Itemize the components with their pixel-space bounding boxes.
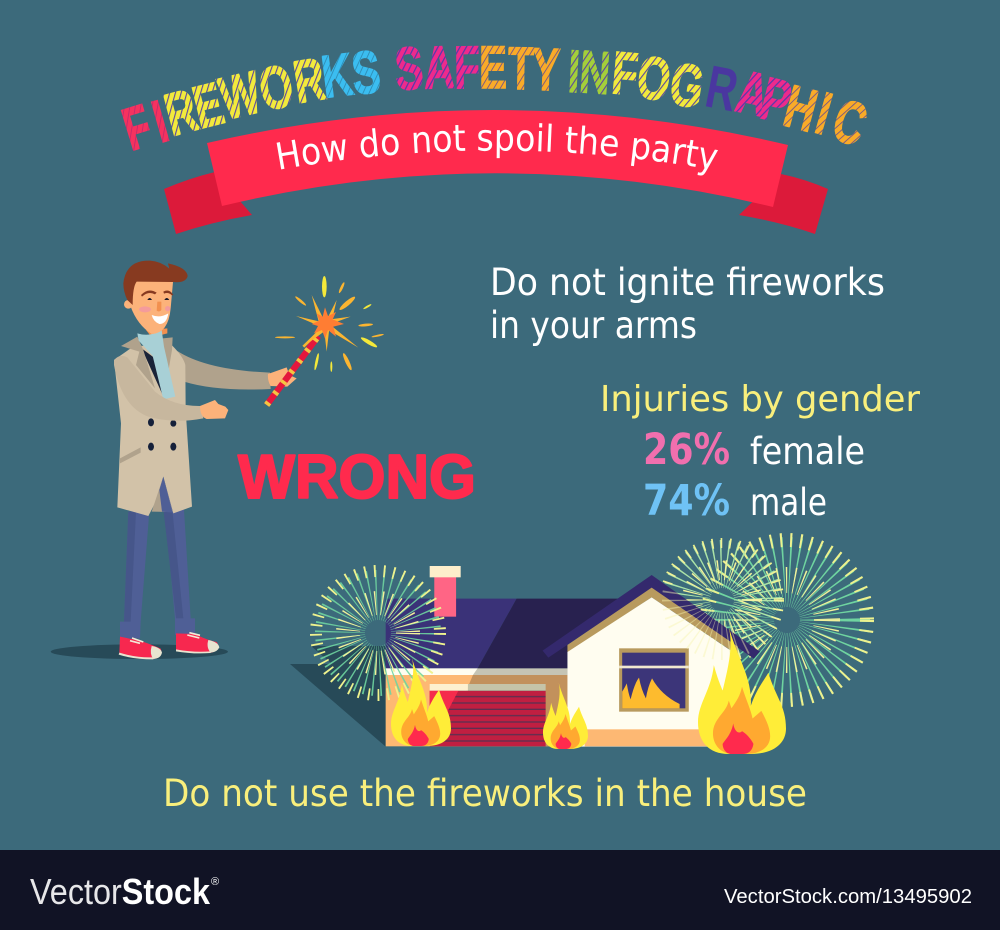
title: I	[809, 79, 839, 147]
registered mark: ®	[211, 876, 219, 888]
ground shadow	[51, 644, 228, 659]
heading: do not ignite	[490, 261, 885, 347]
neck	[146, 328, 167, 337]
title: I	[566, 37, 582, 105]
ribbon banner	[164, 110, 828, 234]
coat inner shade	[152, 477, 173, 512]
scarf	[137, 330, 175, 399]
title: N	[578, 38, 612, 107]
burning house	[290, 566, 760, 747]
garage wall	[386, 675, 567, 746]
title: A	[423, 33, 455, 101]
title: O	[634, 43, 674, 113]
ribbon main band	[207, 110, 788, 207]
title: F	[115, 91, 159, 163]
male stat	[643, 476, 827, 526]
title	[115, 33, 875, 163]
fascia shade	[473, 668, 567, 675]
back arm	[177, 351, 271, 390]
title: S	[349, 37, 383, 107]
female stat: female	[750, 430, 865, 473]
title: F	[454, 33, 480, 101]
title: I	[145, 87, 175, 155]
stats heading: Injuries by gender	[600, 379, 920, 420]
ribbon right tail	[739, 174, 828, 234]
male stat: 74%	[643, 476, 730, 526]
ribbon left tail	[164, 172, 252, 234]
heading: do not ignite: in your arms	[490, 304, 697, 347]
shirt	[142, 348, 163, 395]
title: W	[213, 58, 267, 132]
title: K	[318, 40, 356, 110]
window	[619, 648, 689, 712]
footer bar	[0, 850, 1000, 930]
title: H	[778, 72, 824, 145]
subtitle: How do not spoil the party	[276, 123, 718, 176]
shoes	[119, 633, 219, 659]
footer url: VectorStock.com/13495902	[724, 886, 972, 908]
title: S	[393, 34, 425, 103]
title: A	[731, 57, 775, 129]
sparks	[275, 276, 384, 372]
roof left	[386, 599, 517, 668]
footer logo: VectorStock	[30, 871, 211, 912]
chimney	[430, 566, 461, 617]
wall base	[585, 729, 707, 746]
title: R	[289, 45, 329, 116]
house wall	[567, 597, 736, 747]
buttons	[148, 418, 176, 451]
man with sparkler	[51, 261, 384, 659]
title: Y	[531, 35, 561, 103]
title: T	[508, 34, 535, 102]
title: R	[701, 52, 743, 124]
title: P	[754, 64, 798, 136]
lapels	[121, 337, 173, 388]
pocket	[120, 447, 141, 463]
flame: middle	[543, 683, 588, 749]
firework: right large	[707, 540, 867, 700]
trouser front	[159, 477, 173, 513]
sparkler stick	[267, 327, 323, 405]
firework overlay on gable	[686, 564, 758, 636]
hand holding sparkler	[268, 367, 297, 387]
injuries by gender stats	[600, 379, 920, 526]
firework: middle right	[665, 543, 779, 657]
firework: left	[316, 571, 440, 695]
flame: right	[698, 627, 786, 754]
gable roof	[543, 575, 760, 659]
title: F	[609, 39, 641, 108]
title: E	[479, 34, 507, 101]
WRONG label: WRONG	[238, 443, 476, 512]
caption: do not use in house: Do not use the fireworks in the house	[163, 772, 807, 815]
title: O	[254, 51, 298, 123]
title: E	[186, 69, 230, 141]
head	[123, 261, 188, 334]
female stat	[643, 425, 865, 475]
coat	[114, 345, 192, 516]
heading: do not ignite: Do not ignite fireworks	[490, 261, 885, 304]
title: R	[158, 76, 204, 149]
roof right	[478, 599, 619, 668]
gable trim	[567, 588, 738, 655]
fascia	[386, 668, 478, 675]
garage wall shade	[443, 675, 567, 746]
front hand	[200, 400, 228, 419]
male stat: male	[750, 481, 827, 524]
garage door	[430, 684, 546, 746]
title: G	[666, 49, 708, 121]
front arm	[114, 356, 203, 421]
flame: left	[391, 658, 451, 746]
title: C	[825, 85, 875, 159]
legs	[120, 480, 195, 638]
flames	[391, 627, 786, 754]
female stat: 26%	[643, 425, 730, 475]
house shadow	[290, 646, 386, 747]
